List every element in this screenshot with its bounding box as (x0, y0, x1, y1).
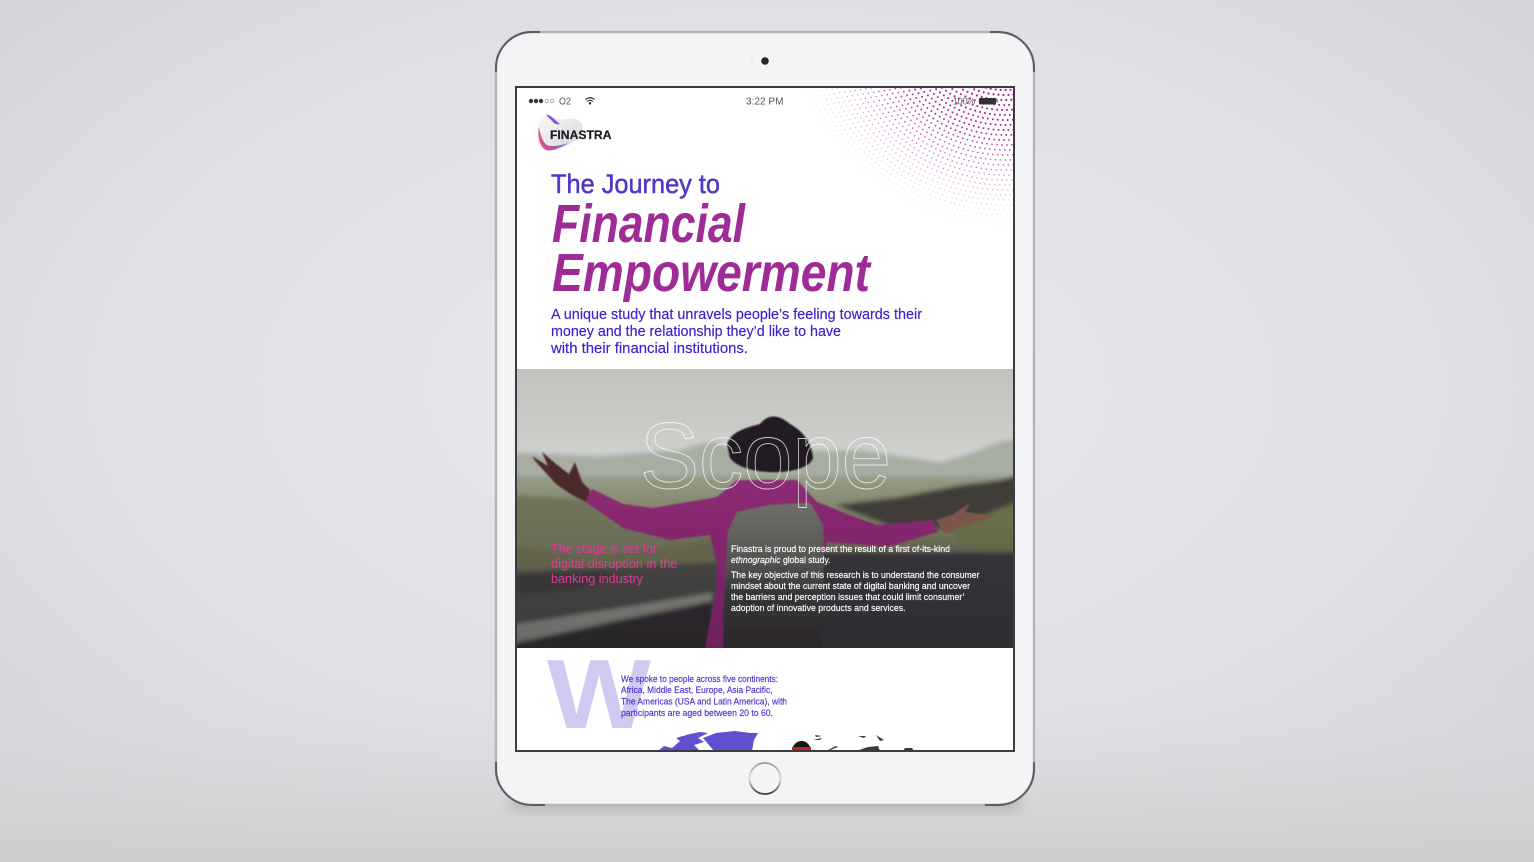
continents text: Africa, Middle East, Europe, Asia Pacific, (621, 685, 772, 695)
clock: 3:22 PM (746, 96, 784, 108)
scope body text: Finastra is proud to present the result of a first of-its-kind (731, 544, 950, 554)
device corner highlights (496, 32, 1034, 805)
logo (537, 114, 612, 151)
scope body text: mindset about the current state of digital banking and uncover (731, 581, 970, 591)
map: dark landmasses (813, 735, 914, 751)
tablet device (496, 32, 1034, 805)
scope body text: ethnographic global study. (731, 555, 830, 565)
scope tagline: The stage is set for (551, 541, 658, 556)
continents text (621, 674, 787, 718)
scope body text (731, 544, 980, 613)
logo wordmark: FINASTRA (550, 128, 612, 142)
title line 2: Financial (552, 194, 746, 254)
icon: wifi (586, 98, 594, 104)
screen (516, 87, 1014, 751)
subtitle (550, 307, 922, 357)
device shadow (510, 796, 1020, 810)
subtitle: with their financial institutions. (550, 341, 748, 357)
scope tagline: digital disruption in the (551, 556, 678, 571)
halftone dot pattern (804, 88, 1013, 226)
home button (750, 763, 780, 794)
title line 1: The Journey to (551, 169, 720, 199)
drop cap W: W (547, 639, 652, 749)
panel: scope photo (517, 369, 1013, 648)
camera (761, 57, 769, 65)
carrier: O2 (559, 96, 571, 108)
title line 3: Empowerment (552, 243, 872, 303)
map: greenland (703, 731, 758, 751)
continents text: participants are aged between 20 to 60. (621, 708, 773, 718)
continents text: The Americas (USA and Latin America), with (621, 696, 787, 706)
map: north america islands (658, 732, 708, 751)
logo mark (537, 114, 583, 151)
icon: battery (979, 98, 998, 104)
status bar (529, 96, 998, 108)
photo shading (517, 563, 1012, 648)
floor shading (0, 680, 1534, 862)
photo landscape (517, 369, 1013, 648)
tablet body (496, 32, 1034, 805)
scope heading: Scope (640, 403, 891, 508)
signal dots (529, 99, 554, 103)
scope body text: adoption of innovative products and services. (731, 603, 906, 613)
battery percent: 100% (953, 96, 975, 108)
subtitle: A unique study that unravels people’s feeling towards their (551, 307, 922, 323)
photo person (532, 416, 994, 648)
scope tagline: banking industry (551, 571, 644, 586)
subtitle: money and the relationship they’d like to have (551, 324, 841, 340)
scope body text: The key objective of this research is to understand the consumer (731, 570, 980, 580)
continents text: We spoke to people across five continents: (621, 674, 778, 684)
title (551, 169, 872, 303)
sensor (750, 59, 754, 63)
map: flag marker (792, 741, 811, 750)
scope tagline (551, 541, 678, 586)
world map (659, 731, 914, 750)
scope body text: the barriers and perception issues that could limit consumer’ (731, 592, 964, 602)
